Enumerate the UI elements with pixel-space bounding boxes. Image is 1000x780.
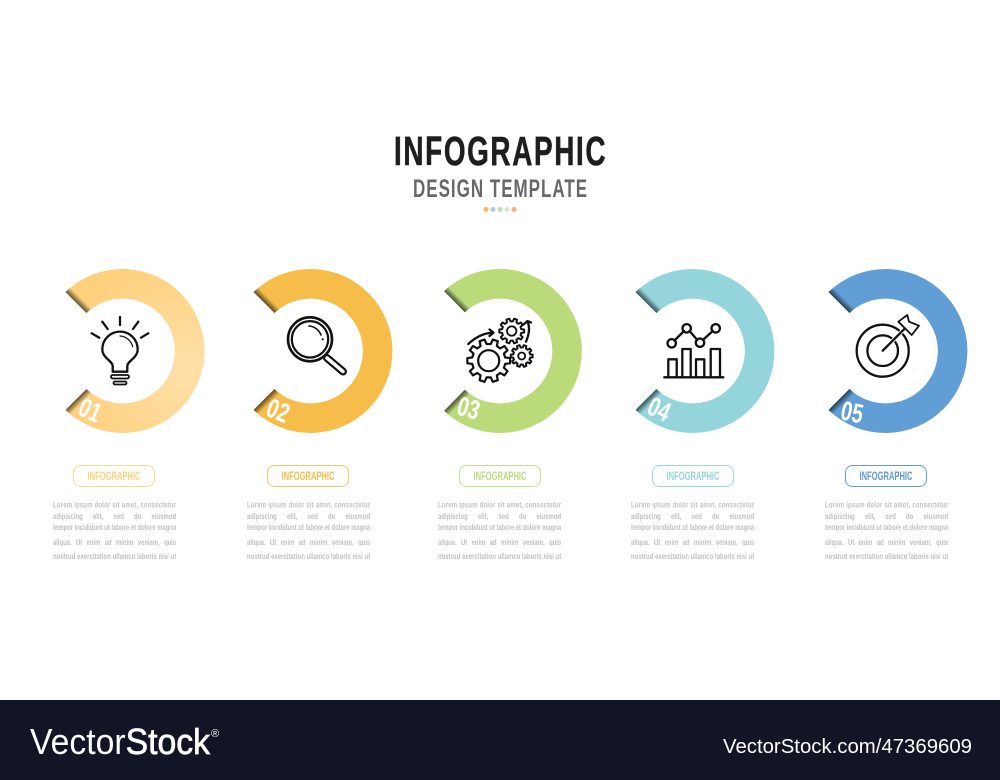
footer bar: VectorStock — [30, 721, 211, 762]
step 4 text: Lorem ipsum dolor sit amet, consectetur — [631, 499, 754, 510]
step 1 text: adipiscing elit, sed do eiusmod — [53, 511, 176, 521]
title: INFOGRAPHIC — [394, 129, 605, 174]
step 3 text — [438, 499, 562, 561]
step 5 text — [825, 499, 949, 561]
icon: target with arrow — [857, 315, 919, 377]
step 4 label — [652, 466, 734, 486]
step 1 text: tempor incididunt ut labore et dolore magna — [53, 522, 177, 532]
step 2 text: Lorem ipsum dolor sit amet, consectetur — [247, 499, 370, 510]
step 5 ring — [820, 269, 967, 433]
decorative dots — [484, 207, 516, 212]
step 2 text: aliqua. Ut enim ad minim veniam, quis — [247, 537, 370, 547]
footer bar: VectorStock.com/47369609 — [723, 736, 972, 758]
footer bar — [0, 700, 1000, 780]
step 3 label — [460, 466, 540, 486]
step 2 text: tempor incididunt ut labore et dolore magna — [247, 522, 371, 532]
step 3 text: Lorem ipsum dolor sit amet, consectetur — [438, 499, 561, 510]
step 5 label: INFOGRAPHIC — [860, 471, 912, 483]
step 5 text: nostrud exercitation ullamco laboris nisi ut — [825, 551, 949, 561]
step 3 text: nostrud exercitation ullamco laboris nisi ut — [438, 551, 562, 561]
step 1 ring — [58, 269, 204, 433]
step 5 text: Lorem ipsum dolor sit amet, consectetur — [825, 499, 948, 510]
step 2 label: INFOGRAPHIC — [282, 471, 334, 483]
step 5 ring: 05 — [838, 396, 866, 429]
step 3 label: INFOGRAPHIC — [474, 471, 526, 483]
step 5 text: adipiscing elit, sed do eiusmod — [825, 511, 948, 521]
footer bar: ® — [211, 728, 219, 740]
step 4 label: INFOGRAPHIC — [666, 471, 720, 483]
step 5 label — [846, 466, 926, 486]
step 3 text: aliqua. Ut enim ad minim veniam, quis — [438, 537, 561, 547]
step 2 ring — [246, 269, 392, 433]
step 4 text: tempor incididunt ut labore et dolore magna — [631, 522, 755, 532]
step 4 text — [631, 499, 755, 561]
icon: bar and line chart — [664, 324, 723, 377]
step 5 text: aliqua. Ut enim ad minim veniam, quis — [825, 537, 948, 547]
step 1 text: nostrud exercitation ullamco laboris nisi ut — [53, 551, 177, 561]
icon: gears — [467, 319, 533, 382]
step 2 label — [268, 466, 348, 486]
step 3 text: adipiscing elit, sed do eiusmod — [438, 511, 561, 521]
step 4 text: nostrud exercitation ullamco laboris nisi ut — [631, 551, 755, 561]
step 1 text: Lorem ipsum dolor sit amet, consectetur — [53, 499, 176, 510]
step 1 label: INFOGRAPHIC — [88, 471, 140, 483]
step 2 text: nostrud exercitation ullamco laboris nisi ut — [247, 551, 371, 561]
step 2 text: adipiscing elit, sed do eiusmod — [247, 511, 370, 521]
step 5 text: tempor incididunt ut labore et dolore magna — [825, 522, 949, 532]
icon: light bulb — [92, 317, 148, 384]
step 4 ring — [628, 269, 774, 433]
step 1 text: aliqua. Ut enim ad minim veniam, quis — [53, 537, 176, 547]
step 2 text — [247, 499, 371, 561]
step 3 text: tempor incididunt ut labore et dolore magna — [438, 522, 562, 532]
step 1 ring: 01 — [74, 392, 106, 428]
step 2 ring: 02 — [262, 393, 294, 429]
step 4 ring: 04 — [643, 391, 675, 427]
step 1 label — [74, 466, 154, 486]
step 4 text: aliqua. Ut enim ad minim veniam, quis — [631, 537, 754, 547]
step 1 text — [53, 499, 177, 561]
subtitle: DESIGN TEMPLATE — [413, 175, 587, 203]
icon: magnifying glass — [288, 317, 343, 372]
step 3 ring — [443, 269, 582, 433]
step 3 ring: 03 — [454, 391, 483, 426]
step 4 text: adipiscing elit, sed do eiusmod — [631, 511, 754, 521]
